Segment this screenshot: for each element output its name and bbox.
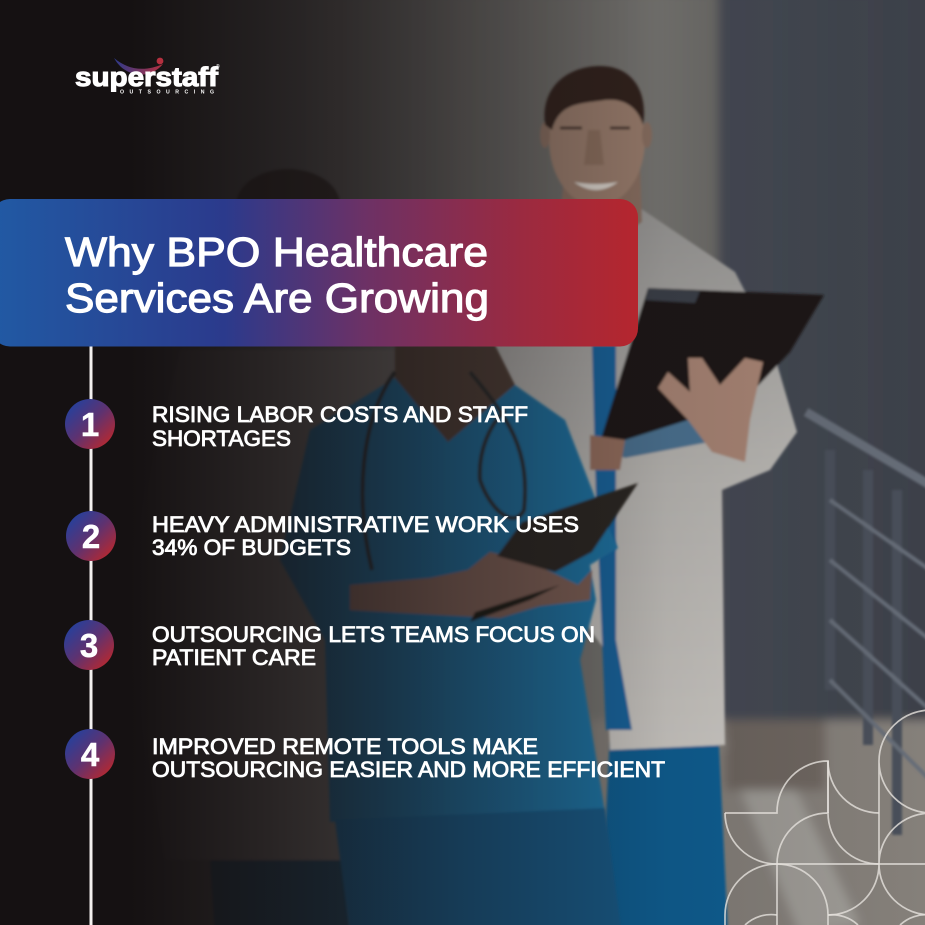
- logo swoosh: [114, 58, 163, 75]
- number badge 2: [66, 511, 116, 561]
- title banner: Services Are Growing: [65, 275, 489, 321]
- banner background: [0, 199, 638, 346]
- number badge 3: 3: [80, 627, 98, 664]
- x-ray folder: [598, 288, 824, 452]
- item 1: [65, 399, 528, 451]
- item 3: [64, 620, 595, 670]
- item 1 text: RISING LABOR COSTS AND STAFF: [152, 402, 528, 427]
- item 4 text: OUTSOURCING EASIER AND MORE EFFICIENT: [152, 757, 665, 782]
- stethoscope: [363, 372, 525, 570]
- item 4 text: IMPROVED REMOTE TOOLS MAKE: [152, 734, 538, 759]
- logo registered mark: ®: [216, 63, 220, 70]
- logo wordmark: superstaff: [75, 62, 219, 92]
- doctor hand: [658, 358, 763, 462]
- doctor shirt and tie: [592, 345, 632, 730]
- number badge 2: 2: [82, 518, 100, 555]
- number badge 1: [65, 399, 115, 449]
- number badge 1: 1: [81, 406, 99, 443]
- doctor neck and head: [560, 165, 642, 250]
- number badge 4: 4: [81, 736, 100, 773]
- nurse scrubs top: [280, 378, 618, 822]
- logo red dot: [157, 58, 163, 64]
- railing: [806, 412, 925, 835]
- vertical timeline line: [90, 346, 92, 925]
- logo: superstaff outsourcing: [75, 58, 220, 96]
- doctor coat: [470, 208, 797, 750]
- nurse: [280, 345, 638, 925]
- item 4: [65, 729, 665, 782]
- number badge 4: [65, 729, 115, 779]
- item 2 text: 34% OF BUDGETS: [152, 535, 351, 560]
- nurse trousers: [335, 808, 622, 925]
- item 2 text: HEAVY ADMINISTRATIVE WORK USES: [152, 512, 579, 537]
- nurse neck: [395, 345, 515, 442]
- nurse arms and hands: [350, 552, 592, 618]
- title banner: [0, 199, 638, 346]
- nurse clipboard: [497, 483, 638, 572]
- number badge 3: [64, 620, 114, 670]
- doctor trousers: [600, 725, 728, 925]
- doctor: [470, 66, 824, 925]
- item 3 text: OUTSOURCING LETS TEAMS FOCUS ON: [152, 622, 595, 647]
- item 3 text: PATIENT CARE: [152, 645, 316, 670]
- title: Why BPO Healthcare: [65, 229, 488, 275]
- back staff member: [120, 169, 480, 925]
- decorative geometric line pattern: [725, 710, 925, 925]
- logo tagline: OUTSOURCING: [120, 90, 214, 96]
- item 2: [66, 511, 579, 561]
- item 1 text: SHORTAGES: [152, 426, 291, 451]
